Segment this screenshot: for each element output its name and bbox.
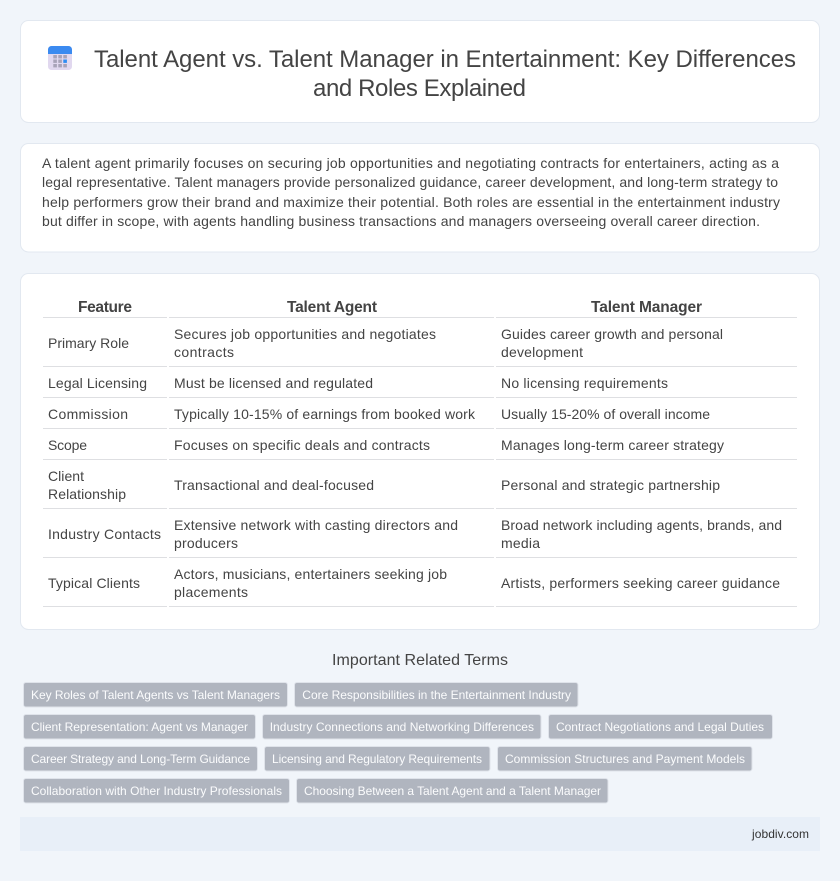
panel: introduction paragraph <box>20 144 820 252</box>
footer source text: jobdiv.com <box>751 827 809 841</box>
tag: Choosing Between a Talent Agent and a Talent Manager <box>304 784 601 798</box>
tag: Contract Negotiations and Legal Duties <box>556 720 764 734</box>
table header row: Talent Manager <box>591 299 702 316</box>
row: scope: Manages long-term career strategy <box>501 437 724 453</box>
paragraph text: help performers grow their brand and maximize their potential. Both roles are essential in the entertainment industry <box>42 194 780 210</box>
tag <box>294 682 578 707</box>
paragraph text: legal representative. Talent managers provide personalized guidance, career development, and long-term strategy to <box>42 174 778 190</box>
tag <box>24 778 290 803</box>
row: industry contacts: Broad network including agents, brands, and <box>501 517 782 533</box>
tag <box>24 714 256 739</box>
table header row: Feature <box>78 299 132 316</box>
row: client relationship: Client <box>48 468 84 484</box>
row: commission: Typically 10-15% of earnings from booked work <box>174 406 476 422</box>
heading: important related terms: Important Related Terms <box>332 652 508 669</box>
paragraph text: A talent agent primarily focuses on securing job opportunities and negotiating contracts for entertainers, acting as a <box>42 155 779 171</box>
row: scope <box>48 437 724 453</box>
tag <box>498 746 752 771</box>
row: client relationship: Relationship <box>48 486 126 502</box>
row: primary role: development <box>501 344 583 360</box>
row: legal licensing: Must be licensed and regulated <box>174 375 373 391</box>
tag <box>264 746 490 771</box>
tag: Client Representation: Agent vs Manager <box>31 720 248 734</box>
row: client relationship <box>48 468 720 502</box>
row: primary role: contracts <box>174 344 234 360</box>
row: commission: Commission <box>48 406 128 422</box>
tag <box>24 746 258 771</box>
row: industry contacts: media <box>501 535 540 551</box>
tag: Industry Connections and Networking Differences <box>270 720 534 734</box>
tag: Career Strategy and Long-Term Guidance <box>31 752 250 766</box>
row: primary role: Primary Role <box>48 335 129 351</box>
row: typical clients: Actors, musicians, entertainers seeking job <box>174 566 447 582</box>
icon: calendar <box>48 46 72 70</box>
row: typical clients: placements <box>174 584 248 600</box>
table header row: Talent Agent <box>287 299 377 316</box>
footer bar <box>20 817 820 851</box>
title text: Talent Agent vs. Talent Manager in Entertainment: Key Differences <box>94 46 796 73</box>
tag <box>262 714 541 739</box>
row: industry contacts: Extensive network with casting directors and <box>174 517 458 533</box>
row: industry contacts: producers <box>174 535 238 551</box>
title text: and Roles Explained <box>313 75 526 102</box>
row: primary role <box>48 326 723 360</box>
row: primary role: Guides career growth and personal <box>501 326 723 342</box>
paragraph text: but differ in scope, with agents handling business transactions and managers overseeing overall career direction. <box>42 213 760 229</box>
row: legal licensing: Legal Licensing <box>48 375 147 391</box>
tag: Core Responsibilities in the Entertainment Industry <box>302 688 571 702</box>
tag <box>24 682 288 707</box>
row: scope: Focuses on specific deals and contracts <box>174 437 430 453</box>
row: industry contacts: Industry Contacts <box>48 526 161 542</box>
table header row <box>78 299 702 316</box>
tag: Licensing and Regulatory Requirements <box>272 752 482 766</box>
row: primary role: Secures job opportunities and negotiates <box>174 326 436 342</box>
row: typical clients: Artists, performers seeking career guidance <box>501 575 780 591</box>
tag <box>296 778 608 803</box>
panel: comparison table <box>20 274 820 630</box>
row: client relationship: Personal and strategic partnership <box>501 477 720 493</box>
row: legal licensing: No licensing requirements <box>501 375 668 391</box>
tag <box>548 714 772 739</box>
related term tags <box>24 682 772 803</box>
row: typical clients <box>48 566 780 600</box>
tag: Commission Structures and Payment Models <box>505 752 745 766</box>
row: commission <box>48 406 710 422</box>
paragraph text <box>42 155 780 229</box>
panel: title <box>20 20 820 122</box>
row: industry contacts <box>48 517 782 551</box>
tag: Key Roles of Talent Agents vs Talent Managers <box>31 688 280 702</box>
tag: Collaboration with Other Industry Professionals <box>31 784 282 798</box>
row: commission: Usually 15-20% of overall income <box>501 406 710 422</box>
row: client relationship: Transactional and deal-focused <box>174 477 374 493</box>
row: scope: Scope <box>48 437 87 453</box>
row: typical clients: Typical Clients <box>48 575 140 591</box>
title text <box>94 46 796 102</box>
row: legal licensing <box>48 375 668 391</box>
